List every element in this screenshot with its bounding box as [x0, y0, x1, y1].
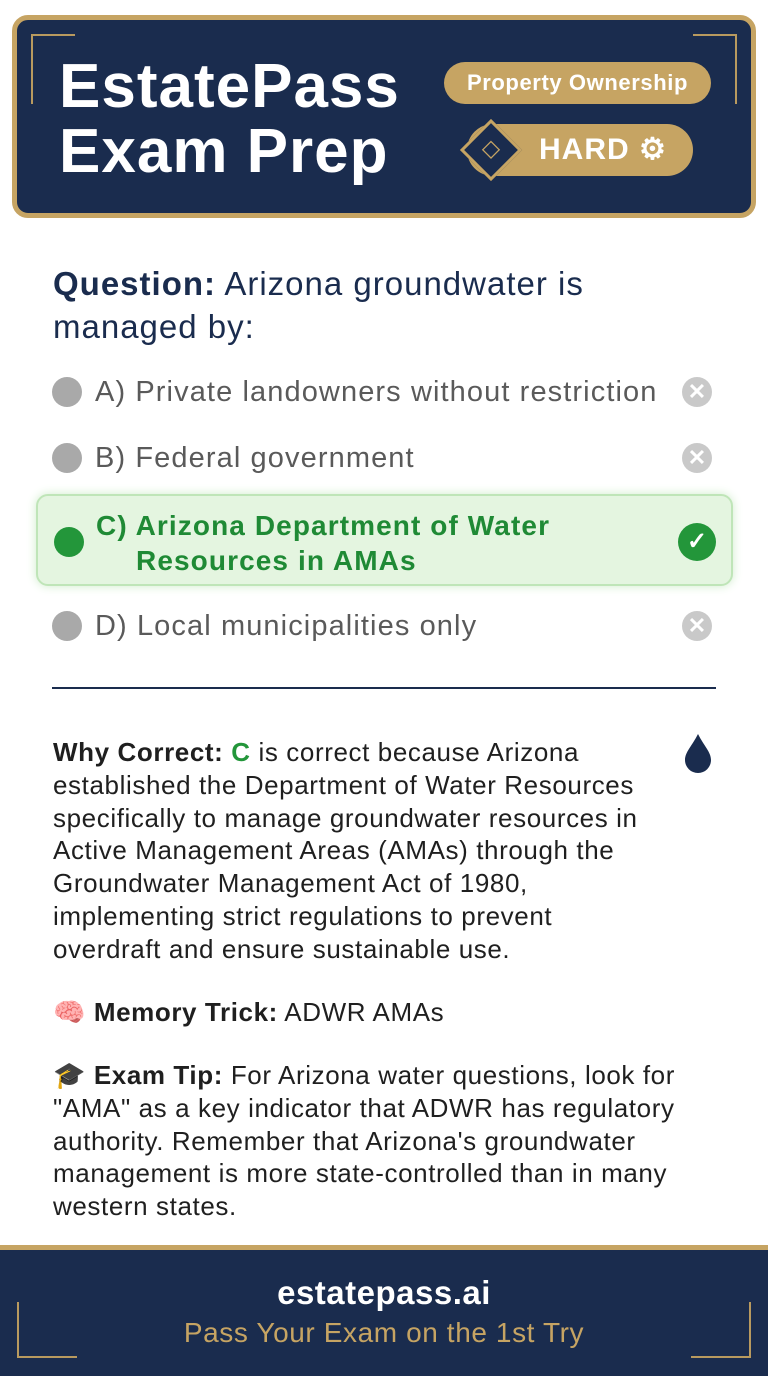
why correct: overdraft and ensure sustainable use.: [53, 934, 510, 964]
title: [59, 52, 400, 186]
corner brackets: [31, 34, 75, 104]
option A: ✕: [688, 379, 706, 404]
why correct: Why Correct: C is correct because Arizona established the Department of Water Resources specifically to manage groundwater resources in Active Management Areas (AMAs) through the Groundwater Management Act of 1980, implementing strict regulations to prevent: [53, 737, 638, 931]
option A: A) Private landowners without restriction: [95, 376, 657, 408]
title: Exam Prep: [59, 117, 389, 186]
footer site: estatepass.ai: [277, 1274, 491, 1311]
pill: difficulty: [467, 124, 693, 176]
icon: check: [678, 523, 716, 561]
exam tip: 🎓 Exam Tip: For Arizona water questions, look for "AMA" as a key indicator that ADWR has regulatory authority. Remember that Arizona's groundwater management is more state-controlled than in many western states.: [53, 1060, 675, 1221]
option D: [52, 610, 712, 642]
header panel: [12, 15, 756, 218]
option D: D) Local municipalities only: [95, 610, 477, 642]
memory trick: 🧠 Memory Trick: ADWR AMAs: [53, 997, 444, 1027]
option B: B) Federal government: [95, 442, 415, 474]
option C correct: Resources in AMAs: [136, 545, 417, 576]
icon: diamond: [460, 119, 522, 181]
title: EstatePass: [59, 52, 400, 121]
question: Question: Arizona groundwater is managed by:: [53, 265, 584, 345]
footer tagline: Pass Your Exam on the 1st Try: [184, 1317, 584, 1348]
footer: [0, 1245, 768, 1376]
option C correct: [36, 494, 733, 586]
icon: water drop: [685, 734, 711, 773]
icon: diamond: ◇: [482, 135, 500, 162]
option B: [52, 442, 712, 474]
pill: difficulty: HARD ⚙: [539, 133, 667, 166]
pill: category: [444, 62, 711, 104]
option C correct: C) Arizona Department of Water: [96, 510, 550, 541]
pill: category: Property Ownership: [467, 70, 688, 95]
icon: check: ✓: [687, 528, 707, 555]
option B: ✕: [688, 445, 706, 470]
option D: ✕: [688, 613, 706, 638]
